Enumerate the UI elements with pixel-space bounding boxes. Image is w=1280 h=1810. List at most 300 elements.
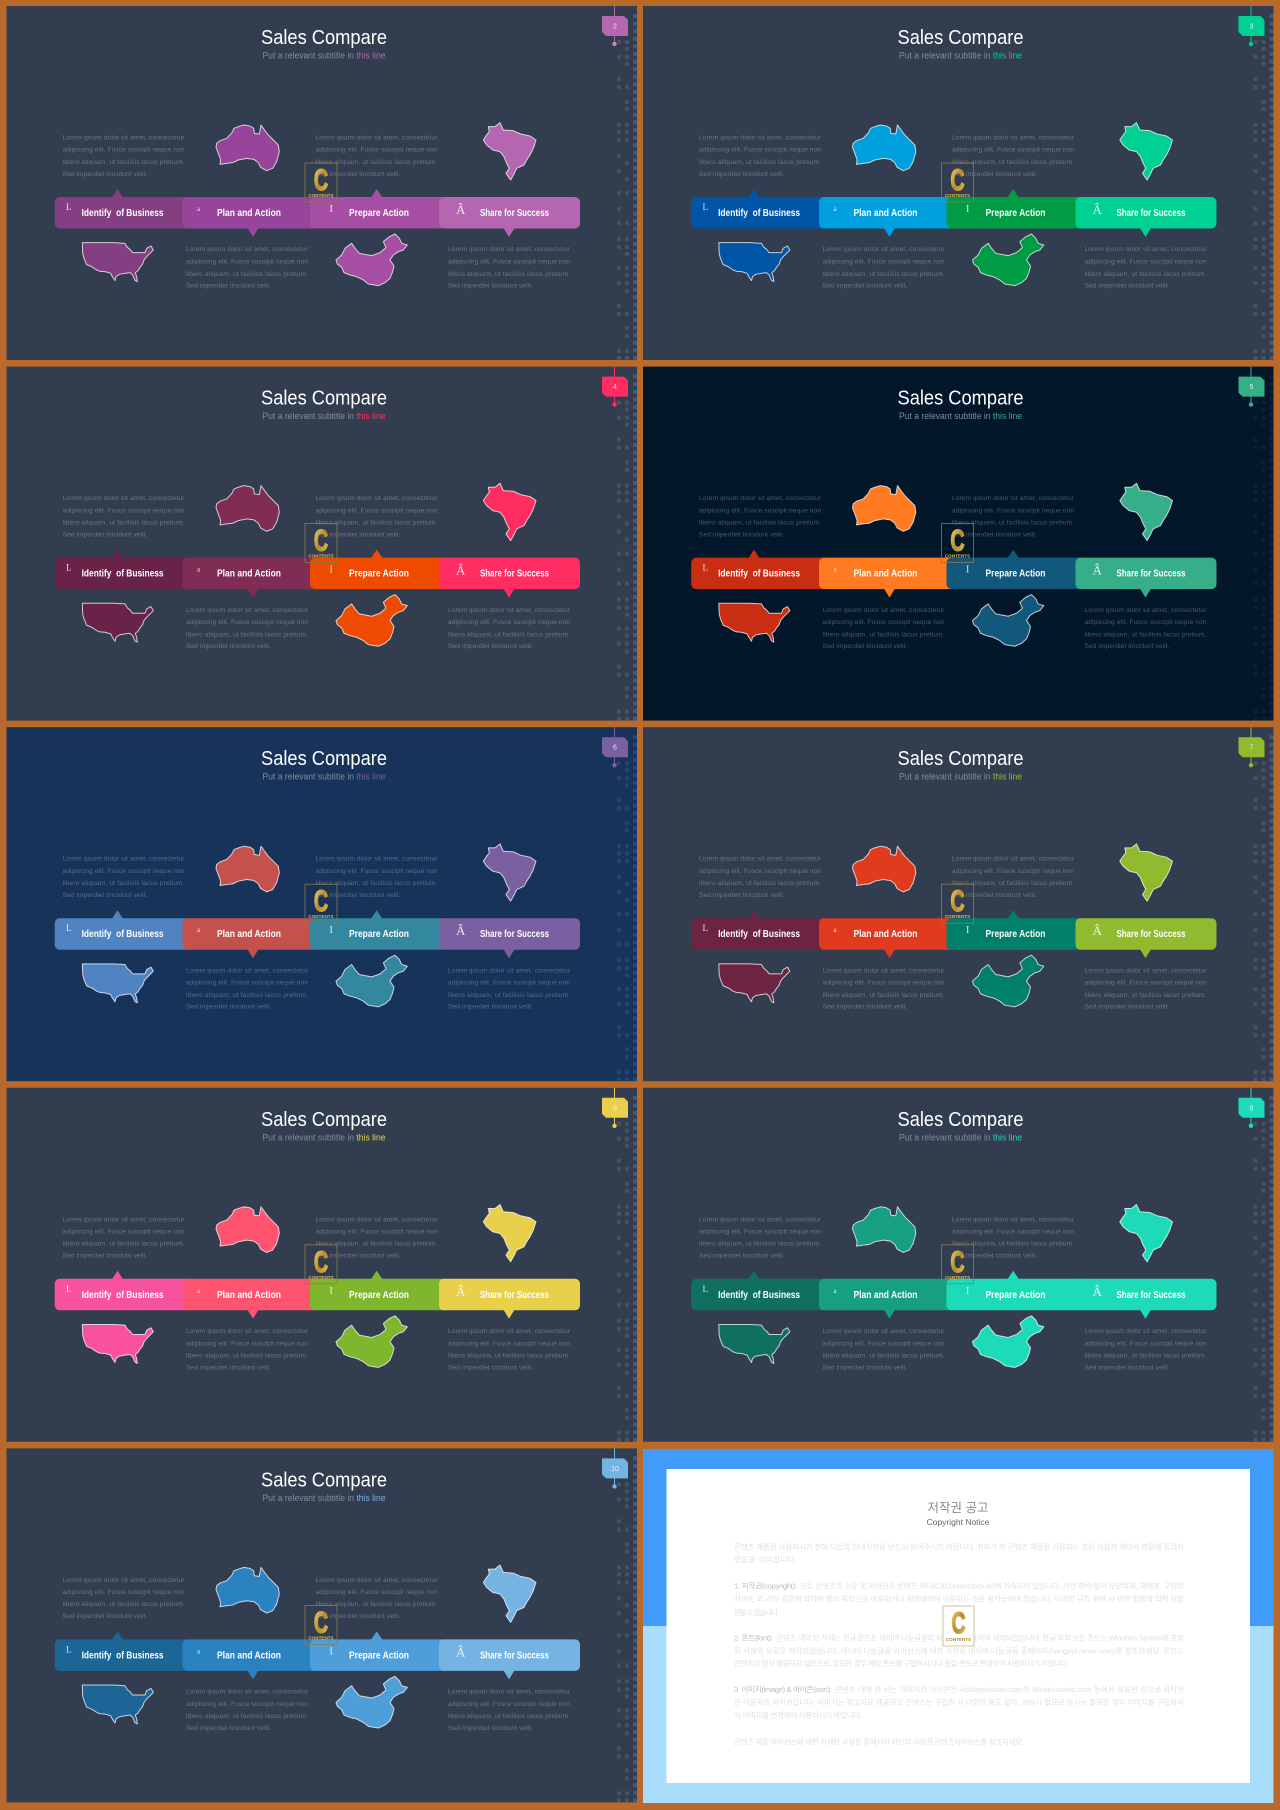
text block 1: adipiscing elit. Fusce suscipit neque non — [699, 507, 821, 514]
text block 4: adipiscing elit. Fusce suscipit neque non — [1084, 1340, 1207, 1347]
text block 4: Lorem ipsum dolor sit amet, consectetur — [448, 246, 571, 253]
watermark logo: CONTENTS — [946, 1637, 971, 1642]
subtitle: Put a relevant subtitle in this line — [262, 1493, 386, 1504]
segmented bar: Â — [456, 202, 466, 217]
watermark logo: CONTENTS — [308, 914, 334, 919]
segmented bar: a — [197, 205, 201, 213]
map: Brazil — [483, 1565, 536, 1622]
map: USA — [82, 243, 153, 282]
watermark logo — [943, 1606, 974, 1646]
segmented bar — [55, 550, 580, 598]
text block 4: libero aliquam, ut facilisis lacus pretium. — [448, 1353, 570, 1360]
text block 1: libero aliquam, ut facilisis lacus pretium. — [62, 519, 185, 526]
text block 4: adipiscing elit. Fusce suscipit neque non — [448, 1701, 570, 1708]
watermark logo: C — [314, 164, 328, 197]
clause 1 copyright: 받을 수 있습니다. — [734, 1607, 779, 1617]
text block 1 — [699, 1216, 822, 1260]
text block 4: Sed imperdiet tincidunt velit. — [1084, 282, 1170, 290]
text block 3: libero aliquam, ut facilisis lacus pretium. — [316, 159, 438, 166]
segmented bar: L — [66, 202, 72, 212]
text block 2: libero aliquam, ut facilisis lacus pretium. — [186, 631, 308, 638]
text block 3: adipiscing elit. Fusce suscipit neque non — [316, 507, 438, 514]
text block 1: adipiscing elit. Fusce suscipit neque non — [62, 1589, 185, 1596]
map: China — [336, 1316, 407, 1367]
map: USA — [82, 603, 153, 642]
segmented bar: Share for Success — [480, 1649, 549, 1661]
map: China — [972, 234, 1044, 286]
text block 3: Sed imperdiet tincidunt velit. — [952, 531, 1037, 538]
map: USA — [719, 964, 790, 1003]
page tab — [1238, 1088, 1264, 1128]
segmented bar: L — [702, 202, 708, 212]
text block 3 — [316, 1577, 438, 1620]
text block 1: libero aliquam, ut facilisis lacus pretium. — [62, 1241, 185, 1248]
watermark logo — [305, 524, 337, 563]
text block 2: Sed imperdiet tincidunt velit. — [822, 643, 908, 650]
text block 4 — [1084, 967, 1207, 1011]
text block 4 — [448, 1689, 571, 1732]
clause 2 font: 콘텐츠 내의 한 서체는 한글 폰트는 네이버 나눔글꼴의 저작물을 사용하여 제작되었습니다. 한글 외의 모든 폰트는 Windows System에 포함 — [776, 1632, 1184, 1642]
segmented bar: Prepare Action — [986, 1289, 1046, 1301]
clause 2 font: 2. 폰트(font): — [734, 1634, 773, 1642]
segmented bar — [691, 1271, 1216, 1319]
segmented bar: a — [834, 205, 838, 213]
text block 4 — [448, 967, 571, 1011]
copyright subtitle: Copyright Notice — [927, 1517, 990, 1527]
text block 2: Sed imperdiet tincidunt velit. — [186, 1004, 271, 1011]
segmented bar: Identify of Business — [82, 207, 164, 219]
text block 3: Lorem ipsum dolor sit amet, consectetur — [952, 856, 1075, 863]
map: Australia — [852, 1207, 916, 1252]
text block 2: adipiscing elit. Fusce suscipit neque non — [822, 619, 945, 626]
page tab — [1238, 367, 1264, 407]
text block 4: libero aliquam, ut facilisis lacus pretium. — [448, 631, 570, 638]
text block 1: libero aliquam, ut facilisis lacus pretium. — [62, 880, 185, 887]
text block 3: Sed imperdiet tincidunt velit. — [316, 531, 401, 538]
slide background — [6, 367, 637, 721]
text block 2 — [822, 607, 945, 650]
segmented bar: I — [330, 925, 333, 936]
text block 4: adipiscing elit. Fusce suscipit neque non — [1084, 980, 1207, 987]
text block 4: Sed imperdiet tincidunt velit. — [448, 1364, 533, 1371]
text block 1: Lorem ipsum dolor sit amet, consectetur — [699, 495, 822, 502]
clause 1 copyright — [734, 1580, 1184, 1617]
map: USA — [82, 964, 153, 1003]
text block 2: Lorem ipsum dolor sit amet, consectetur — [186, 607, 309, 614]
text block 3: adipiscing elit. Fusce suscipit neque non — [316, 1229, 438, 1236]
segmented bar: Â — [456, 1284, 466, 1299]
text block 3: Sed imperdiet tincidunt velit. — [316, 1253, 401, 1260]
text block 4: Sed imperdiet tincidunt velit. — [448, 1004, 533, 1011]
text block 4: libero aliquam, ut facilisis lacus pretium. — [1084, 1353, 1207, 1360]
segmented bar: a — [197, 1647, 201, 1655]
copyright title: 저작권 공고 — [928, 1501, 988, 1515]
text block 4 — [448, 607, 571, 650]
segmented bar: Share for Success — [480, 568, 549, 580]
segmented bar: Share for Success — [1116, 928, 1186, 940]
text block 4: adipiscing elit. Fusce suscipit neque non — [448, 1340, 570, 1347]
watermark logo: CONTENTS — [945, 554, 970, 559]
text block 4: Lorem ipsum dolor sit amet, consectetur — [1084, 607, 1207, 614]
text block 1: Sed imperdiet tincidunt velit. — [62, 531, 148, 538]
segmented bar: Share for Success — [480, 928, 549, 940]
page tab: 10 — [611, 1466, 619, 1473]
text block 2: Lorem ipsum dolor sit amet, consectetur — [186, 967, 309, 974]
watermark logo: CONTENTS — [945, 193, 970, 198]
segmented bar: L — [702, 923, 708, 933]
segmented bar: Â — [1092, 1284, 1102, 1299]
text block 3: adipiscing elit. Fusce suscipit neque non — [316, 1589, 438, 1596]
text block 3: Lorem ipsum dolor sit amet, consectetur — [316, 134, 438, 142]
text block 4: Lorem ipsum dolor sit amet, consectetur — [448, 607, 571, 614]
text block 1: Sed imperdiet tincidunt velit. — [699, 531, 784, 538]
text block 1: libero aliquam, ut facilisis lacus pretium. — [699, 880, 821, 887]
text block 3: libero aliquam, ut facilisis lacus pretium. — [316, 519, 438, 526]
page tab: 2 — [613, 24, 617, 30]
panel: slide 9 teal — [643, 1088, 1274, 1442]
text block 3: Sed imperdiet tincidunt velit. — [952, 892, 1037, 899]
text block 1: Lorem ipsum dolor sit amet, consectetur — [699, 856, 822, 863]
watermark logo: CONTENTS — [308, 1635, 334, 1640]
segmented bar: Prepare Action — [349, 568, 409, 580]
text block 3: adipiscing elit. Fusce suscipit neque non — [952, 868, 1074, 875]
map: USA — [719, 243, 790, 282]
text block 2 — [186, 607, 309, 650]
segmented bar: Identify of Business — [82, 1289, 164, 1301]
watermark logo: C — [314, 1246, 328, 1279]
page tab: 8 — [613, 1105, 617, 1112]
map: USA — [719, 603, 790, 642]
page tab: 7 — [1250, 745, 1254, 752]
panel: slide 7 red-lime — [643, 727, 1274, 1081]
text block 3: Sed imperdiet tincidunt velit. — [952, 171, 1037, 178]
text block 3 — [316, 856, 438, 899]
segmented bar: Prepare Action — [349, 928, 409, 940]
text block 2: Sed imperdiet tincidunt velit. — [822, 1364, 908, 1371]
panel: slide 2 purple — [6, 6, 637, 360]
title: Sales Compare — [898, 748, 1024, 770]
segmented bar: Â — [1092, 202, 1102, 217]
clause 3 image and icon — [734, 1684, 1184, 1720]
map: Brazil — [483, 483, 536, 541]
text block 3: libero aliquam, ut facilisis lacus pretium. — [952, 1241, 1074, 1248]
segmented bar: Identify of Business — [82, 568, 164, 580]
text block 1: Lorem ipsum dolor sit amet, consectetur — [62, 134, 185, 142]
segmented bar: Prepare Action — [349, 1289, 409, 1301]
text block 1 — [62, 856, 185, 899]
dot pattern — [1254, 375, 1272, 721]
text block 2: libero aliquam, ut facilisis lacus pretium. — [186, 271, 308, 278]
intro paragraph: 콘텐츠 제품을 사용하시기 전에 다음의 안내사항을 반드시 읽어주시기 바랍니다. 귀하가 이 콘텐츠 제품을 사용하는 것은 사용자 계약서 본문에 동의하 — [734, 1542, 1184, 1552]
map: Australia — [216, 846, 279, 892]
watermark logo: CONTENTS — [945, 914, 970, 919]
map: China — [972, 955, 1044, 1007]
title: Sales Compare — [898, 27, 1024, 49]
watermark logo: C — [314, 1606, 328, 1639]
text block 3: adipiscing elit. Fusce suscipit neque non — [316, 147, 438, 154]
text block 3: adipiscing elit. Fusce suscipit neque non — [952, 1229, 1074, 1236]
text block 1: Sed imperdiet tincidunt velit. — [62, 1613, 148, 1620]
text block 1 — [62, 495, 185, 538]
clause 3 image and icon: 콘텐츠 내에 한 서는 이미지와 아이콘은 Hobbypixabay.com와 Webplusweb.com 등에서 제공된 것으로 저작권 — [835, 1684, 1184, 1694]
segmented bar: a — [834, 926, 838, 934]
page tab: 6 — [613, 745, 617, 752]
segmented bar — [691, 910, 1216, 958]
clause 1 copyright: 1. 저작권(copyright): — [734, 1580, 797, 1590]
text block 4: adipiscing elit. Fusce suscipit neque non — [1084, 619, 1207, 626]
text block 3: Sed imperdiet tincidunt velit. — [316, 892, 401, 899]
text block 3 — [952, 134, 1075, 178]
text block 4: libero aliquam, ut facilisis lacus pretium. — [1084, 992, 1207, 999]
watermark logo — [942, 884, 974, 923]
map: China — [972, 1316, 1044, 1367]
text block 4: libero aliquam, ut facilisis lacus pretium. — [448, 992, 570, 999]
text block 3: Sed imperdiet tincidunt velit. — [316, 171, 401, 178]
segmented bar: Plan and Action — [854, 1289, 918, 1301]
title: Sales Compare — [261, 748, 387, 770]
text block 3: Lorem ipsum dolor sit amet, consectetur — [952, 134, 1075, 142]
text block 2: adipiscing elit. Fusce suscipit neque non — [822, 258, 945, 266]
clause 1 copyright: 모든 콘텐츠의 소유 및 저작권은 콘텐츠 하나(C)(Contentsbox.kr)에 귀속되어 있습니다. 사전 허락 없이 무단복제, 재배포, 구입한 — [800, 1580, 1184, 1590]
background upper band — [643, 1449, 1274, 1626]
segmented bar: a — [834, 566, 838, 574]
segmented bar: Plan and Action — [217, 568, 281, 580]
text block 3: libero aliquam, ut facilisis lacus pretium. — [952, 519, 1074, 526]
text block 1: Lorem ipsum dolor sit amet, consectetur — [699, 134, 822, 142]
segmented bar: I — [966, 1286, 969, 1297]
text block 1: Lorem ipsum dolor sit amet, consectetur — [62, 1216, 185, 1223]
watermark logo — [305, 884, 337, 923]
segmented bar: a — [197, 926, 201, 934]
text block 2: Sed imperdiet tincidunt velit. — [186, 1725, 271, 1732]
panel: slide 3 blue-green — [643, 6, 1274, 360]
watermark logo: CONTENTS — [308, 1275, 334, 1280]
text block 2: Sed imperdiet tincidunt velit. — [186, 282, 271, 290]
segmented bar: L — [66, 1284, 72, 1294]
text block 2 — [822, 246, 945, 290]
map: Brazil — [1120, 844, 1172, 901]
subtitle: Put a relevant subtitle in this line — [262, 1132, 386, 1143]
watermark logo: C — [314, 525, 328, 558]
text block 3: libero aliquam, ut facilisis lacus pretium. — [952, 159, 1074, 166]
text block 4: Sed imperdiet tincidunt velit. — [448, 1725, 533, 1732]
text block 4: adipiscing elit. Fusce suscipit neque non — [448, 619, 570, 626]
text block 1: Lorem ipsum dolor sit amet, consectetur — [62, 856, 185, 863]
slide background — [643, 367, 1274, 721]
page tab: 5 — [1250, 384, 1254, 391]
text block 1: libero aliquam, ut facilisis lacus pretium. — [699, 1241, 821, 1248]
text block 2: adipiscing elit. Fusce suscipit neque non — [186, 980, 308, 987]
panel: slide 10 blues — [6, 1448, 637, 1802]
text block 4: Lorem ipsum dolor sit amet, consectetur — [1084, 1328, 1207, 1335]
text block 4: Sed imperdiet tincidunt velit. — [448, 282, 533, 290]
watermark logo: CONTENTS — [308, 554, 334, 559]
map: Australia — [216, 486, 279, 531]
watermark logo: CONTENTS — [308, 193, 334, 198]
map: China — [336, 1676, 407, 1728]
text block 4: Sed imperdiet tincidunt velit. — [448, 643, 533, 650]
text block 4: Sed imperdiet tincidunt velit. — [1084, 643, 1170, 650]
dot pattern — [617, 1096, 635, 1442]
page tab — [602, 1448, 628, 1489]
watermark logo: C — [314, 885, 328, 918]
segmented bar: Â — [456, 923, 466, 938]
text block 2: adipiscing elit. Fusce suscipit neque non — [186, 258, 308, 266]
text block 3 — [952, 495, 1075, 538]
title: Sales Compare — [898, 388, 1024, 410]
page tab — [1238, 6, 1264, 46]
text block 3: Lorem ipsum dolor sit amet, consectetur — [316, 495, 438, 502]
map: Brazil — [483, 1204, 536, 1262]
segmented bar: I — [330, 1646, 333, 1657]
text block 1: Lorem ipsum dolor sit amet, consectetur — [62, 495, 185, 502]
slide background — [643, 1088, 1274, 1442]
watermark logo: C — [950, 525, 964, 558]
watermark logo: C — [950, 164, 964, 197]
text block 2: Lorem ipsum dolor sit amet, consectetur — [186, 1328, 309, 1335]
text block 4: libero aliquam, ut facilisis lacus pretium. — [448, 271, 570, 278]
text block 2: libero aliquam, ut facilisis lacus pretium. — [186, 1713, 308, 1720]
dot pattern — [1254, 14, 1272, 360]
segmented bar — [55, 189, 580, 237]
map: China — [336, 955, 407, 1007]
segmented bar: Prepare Action — [986, 928, 1046, 940]
watermark logo: C — [952, 1607, 966, 1640]
clause 1 copyright: 사이트 외 기타 경로에 의하여 영리 목적으로 이용하거나 재판매하여 이용하는 것은 불가능하며 있습니다. 이러한 규칙 위반 시 관련 법률에 의해 처벌 — [734, 1594, 1184, 1604]
map: Brazil — [1120, 123, 1172, 180]
text block 1: Sed imperdiet tincidunt velit. — [62, 1253, 148, 1260]
text block 3: Lorem ipsum dolor sit amet, consectetur — [316, 1577, 438, 1584]
text block 3: adipiscing elit. Fusce suscipit neque non — [952, 507, 1074, 514]
text block 2: libero aliquam, ut facilisis lacus pretium. — [822, 631, 945, 638]
text block 4: libero aliquam, ut facilisis lacus pretium. — [1084, 631, 1207, 638]
text block 4: libero aliquam, ut facilisis lacus pretium. — [1084, 271, 1207, 278]
text block 4 — [1084, 246, 1207, 290]
closing note: 콘텐츠 제품 라이선스에 대한 자세한 사항은 홈페이지 하단의 사용권 콘텐츠라이선스를 참조하세요. — [734, 1736, 1024, 1746]
segmented bar: Plan and Action — [854, 207, 918, 219]
text block 1: Lorem ipsum dolor sit amet, consectetur — [699, 1216, 822, 1223]
text block 2: libero aliquam, ut facilisis lacus pretium. — [186, 992, 308, 999]
segmented bar: I — [330, 565, 333, 576]
watermark logo — [305, 163, 337, 202]
watermark logo — [942, 1245, 974, 1284]
text block 2: adipiscing elit. Fusce suscipit neque non — [186, 619, 308, 626]
segmented bar: Plan and Action — [217, 1289, 281, 1301]
text block 1: adipiscing elit. Fusce suscipit neque non — [62, 1229, 185, 1236]
text block 1: libero aliquam, ut facilisis lacus pretium. — [699, 519, 821, 526]
text block 2: Sed imperdiet tincidunt velit. — [186, 1364, 271, 1371]
segmented bar: Identify of Business — [82, 1649, 164, 1661]
map: Australia — [852, 125, 916, 171]
segmented bar: Identify of Business — [718, 1289, 800, 1301]
text block 2 — [186, 1689, 309, 1732]
panel: slide 4 crimson — [6, 367, 637, 721]
text block 4: Sed imperdiet tincidunt velit. — [1084, 1004, 1170, 1011]
text block 4: Lorem ipsum dolor sit amet, consectetur — [448, 967, 571, 974]
text block 1: Sed imperdiet tincidunt velit. — [62, 171, 148, 178]
text block 1: Lorem ipsum dolor sit amet, consectetur — [62, 1577, 185, 1584]
map: Australia — [852, 486, 916, 531]
text block 1 — [699, 495, 822, 538]
clause 2 font: 콘텐츠의 형식 제공되지 않으므로, 필요한 경우 해당 폰트를 구입하시거나 동일 폰트로 변경하여 사용하시기 바랍니다. — [734, 1658, 1069, 1668]
text block 1: adipiscing elit. Fusce suscipit neque non — [699, 147, 821, 154]
text block 2: adipiscing elit. Fusce suscipit neque non — [186, 1701, 308, 1708]
text block 2 — [186, 246, 309, 290]
text block 4: adipiscing elit. Fusce suscipit neque non — [448, 258, 570, 266]
title: Sales Compare — [898, 1109, 1024, 1131]
map: Australia — [852, 846, 916, 892]
text block 4: Lorem ipsum dolor sit amet, consectetur — [448, 1689, 571, 1696]
clause 3 image and icon: 은 이용자의 저작권입니다. 이미지는 참고자료 제공되고 콘텐츠는 구입한 시 다양한 용도 같아, 귀하가 필요로 하시는 필요한 경우 이미지를 구입하여 — [734, 1697, 1184, 1707]
watermark logo: C — [950, 1246, 964, 1279]
text block 3 — [316, 134, 438, 178]
text block 4: libero aliquam, ut facilisis lacus pretium. — [448, 1713, 570, 1720]
text block 1: libero aliquam, ut facilisis lacus pretium. — [62, 1601, 185, 1608]
map: Brazil — [483, 123, 536, 180]
dot pattern — [1254, 735, 1272, 1081]
text block 2: Lorem ipsum dolor sit amet, consectetur — [186, 246, 309, 253]
text block 1 — [62, 134, 185, 178]
subtitle: Put a relevant subtitle in this line — [899, 1132, 1022, 1143]
map: Brazil — [1120, 1204, 1172, 1262]
text block 1: adipiscing elit. Fusce suscipit neque non — [699, 1229, 821, 1236]
text block 3 — [316, 495, 438, 538]
page tab — [602, 6, 628, 46]
segmented bar: Plan and Action — [854, 928, 918, 940]
intro paragraph — [734, 1542, 1184, 1564]
slide background — [6, 727, 637, 1081]
segmented bar: a — [197, 566, 201, 574]
map: China — [336, 234, 407, 286]
slide background — [643, 6, 1274, 360]
text block 3: Sed imperdiet tincidunt velit. — [952, 1253, 1037, 1260]
text block 2: Lorem ipsum dolor sit amet, consectetur — [822, 967, 945, 974]
text block 2: libero aliquam, ut facilisis lacus pretium. — [822, 271, 945, 278]
text block 2: adipiscing elit. Fusce suscipit neque non — [822, 980, 945, 987]
text block 1 — [699, 134, 822, 178]
segmented bar: Plan and Action — [217, 928, 281, 940]
text block 3: adipiscing elit. Fusce suscipit neque non — [316, 868, 438, 875]
text block 2: Lorem ipsum dolor sit amet, consectetur — [822, 246, 945, 253]
subtitle: Put a relevant subtitle in this line — [899, 772, 1022, 783]
text block 4: adipiscing elit. Fusce suscipit neque non — [448, 980, 570, 987]
text block 2: adipiscing elit. Fusce suscipit neque non — [186, 1340, 308, 1347]
text block 3: libero aliquam, ut facilisis lacus pretium. — [316, 880, 438, 887]
text block 4 — [448, 246, 571, 290]
text block 2: libero aliquam, ut facilisis lacus pretium. — [822, 1353, 945, 1360]
segmented bar: Â — [456, 1644, 466, 1659]
clause 2 font: 된 서체와 유료로 제작되었습니다. 네이버 나눔글꼴 라이선스에 대한 사항은 네이버 나눔글꼴 홈페이지(hangeul.naver.com)를 참조하세요. 폰트는 — [734, 1646, 1184, 1656]
subtitle: Put a relevant subtitle in this line — [262, 772, 386, 783]
text block 2: Lorem ipsum dolor sit amet, consectetur — [822, 607, 945, 614]
text block 4: Lorem ipsum dolor sit amet, consectetur — [448, 1328, 571, 1335]
segmented bar: Â — [1092, 563, 1102, 578]
map: Australia — [216, 1567, 279, 1613]
segmented bar: I — [966, 204, 969, 215]
segmented bar: Identify of Business — [718, 568, 800, 580]
text block 3 — [952, 1216, 1075, 1260]
watermark logo — [305, 1605, 337, 1644]
map: USA — [82, 1324, 153, 1363]
watermark logo: CONTENTS — [945, 1275, 970, 1280]
text block 4 — [448, 1328, 571, 1371]
segmented bar: Prepare Action — [986, 207, 1046, 219]
text block 1: Sed imperdiet tincidunt velit. — [699, 171, 784, 178]
text block 2: Sed imperdiet tincidunt velit. — [822, 1004, 908, 1011]
text block 1 — [62, 1577, 185, 1620]
segmented bar: Identify of Business — [82, 928, 164, 940]
text block 4: adipiscing elit. Fusce suscipit neque non — [1084, 258, 1207, 266]
